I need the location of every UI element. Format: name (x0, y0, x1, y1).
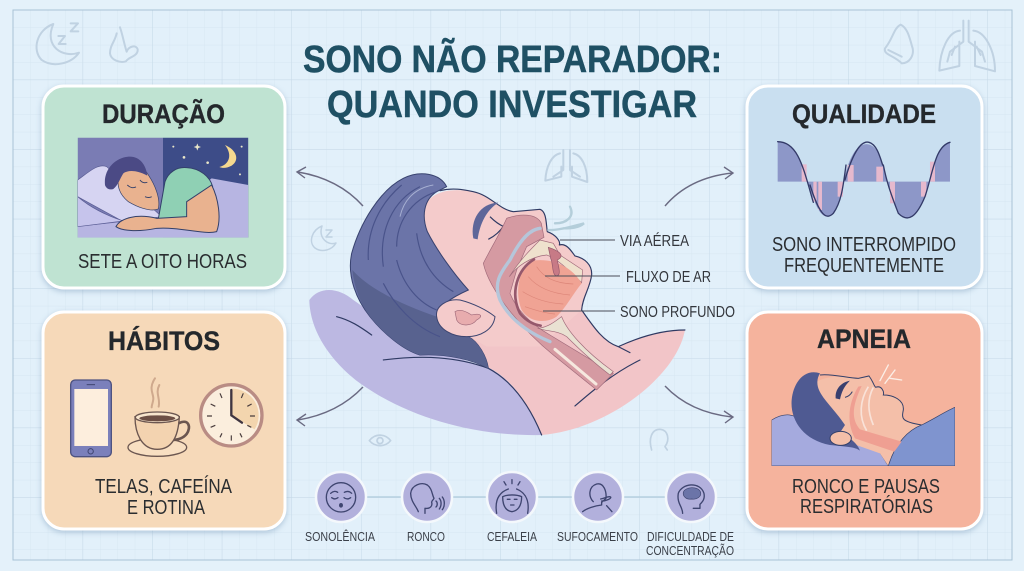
symptom: sufocamento (557, 472, 638, 544)
caption: sono interrompido frequentemente: SONO INTERROMPIDO (772, 234, 956, 256)
hair strands (368, 185, 453, 337)
symptom: cefaleia (487, 472, 537, 544)
illustration: man sleeping at night (78, 138, 248, 238)
background icon: lungs right (939, 21, 995, 71)
caption: ronco e pausas respiratórias: RONCO E PAUSAS (792, 476, 940, 498)
pillow (309, 290, 542, 435)
symptom: dificuldade de concentração: DIFICULDADE DE (647, 529, 734, 544)
background icon: head outline (650, 429, 668, 450)
arrow: to qualidade (665, 167, 733, 206)
symptom: sonolência (305, 472, 375, 544)
pillow outlines (337, 317, 542, 435)
nasal cavity and throat tissue (483, 215, 613, 390)
symptom: sonolência: SONOLÊNCIA (305, 529, 375, 544)
label: via aérea: VIA AÉREA (620, 231, 689, 250)
label: fluxo de ar: FLUXO DE AR (626, 269, 711, 286)
symptom: ronco: RONCO (407, 529, 445, 544)
caption: sete a oito horas: SETE A OITO HORAS (78, 251, 247, 273)
closed eye (488, 217, 504, 239)
caption: telas, cafeína e rotina: E ROTINA (127, 497, 206, 519)
caption: sono interrompido frequentemente (772, 234, 956, 277)
profile and shoulder outline (440, 189, 685, 406)
illustration: man snoring with blocked airway (772, 365, 955, 466)
icon: smartphone (71, 380, 111, 457)
palate (509, 240, 583, 283)
icon: coffee cup (128, 378, 189, 456)
background icon: moon with z letters (37, 23, 79, 64)
chart: interrupted sleep wave (778, 142, 950, 218)
background icon: lungs center (545, 150, 587, 182)
hair (350, 174, 488, 368)
panel: duração (43, 86, 285, 288)
label: sono profundo: SONO PROFUNDO (620, 304, 735, 321)
caption: ronco e pausas respiratórias (792, 476, 940, 518)
title (303, 37, 722, 126)
symptom: dificuldade de concentração: CONCENTRAÇÃO (646, 543, 734, 558)
heading: hábitos: HÁBITOS (108, 325, 220, 356)
arrow: to duração (297, 167, 363, 206)
eyebrow (473, 203, 498, 239)
background icon: moon left (311, 226, 336, 250)
panel: qualidade (747, 86, 982, 288)
caption: sono interrompido frequentemente: FREQUENTEMENTE (784, 255, 944, 277)
jaw rim (515, 259, 541, 326)
breath curls (548, 207, 584, 230)
title: SONO NÃO REPARADOR: (303, 37, 722, 81)
title: QUANDO INVESTIGAR (327, 84, 697, 126)
arrow: to apneia (665, 386, 733, 423)
central illustration: airway cross-section (309, 174, 685, 435)
airflow band (497, 228, 550, 342)
larynx cartilage (538, 317, 613, 375)
face skin (423, 190, 592, 347)
symptom: cefaleia: CEFALEIA (487, 529, 537, 544)
background icon: small nose (110, 27, 138, 62)
panel: apneia (747, 312, 982, 529)
caption: ronco e pausas respiratórias: RESPIRATÓRIAS (800, 495, 933, 518)
windpipe (555, 349, 596, 384)
caption: telas, cafeína e rotina: TELAS, CAFEÍNA (95, 475, 233, 498)
tongue (518, 260, 582, 321)
label: via aérea (560, 231, 689, 250)
symptom connector line (341, 496, 691, 498)
ear (436, 300, 495, 337)
background icon: nose right (885, 25, 913, 63)
icon: clock (201, 385, 262, 446)
neck and shoulder (468, 303, 685, 435)
tongue fibres (523, 267, 573, 314)
symptom: sufocamento: SUFOCAMENTO (557, 529, 638, 544)
panel: hábitos (43, 312, 285, 529)
uvula (548, 247, 561, 276)
caption: telas, cafeína e rotina (95, 475, 233, 519)
symptom: ronco (402, 472, 452, 544)
hair shading (352, 270, 488, 368)
heading: duração: DURAÇÃO (102, 98, 225, 129)
heading: qualidade: QUALIDADE (792, 99, 936, 129)
symptom: dificuldade de concentração (646, 472, 734, 558)
background icon: eye (369, 435, 391, 446)
heading: apneia: APNEIA (817, 324, 911, 354)
arrow: to hábitos (297, 387, 363, 426)
